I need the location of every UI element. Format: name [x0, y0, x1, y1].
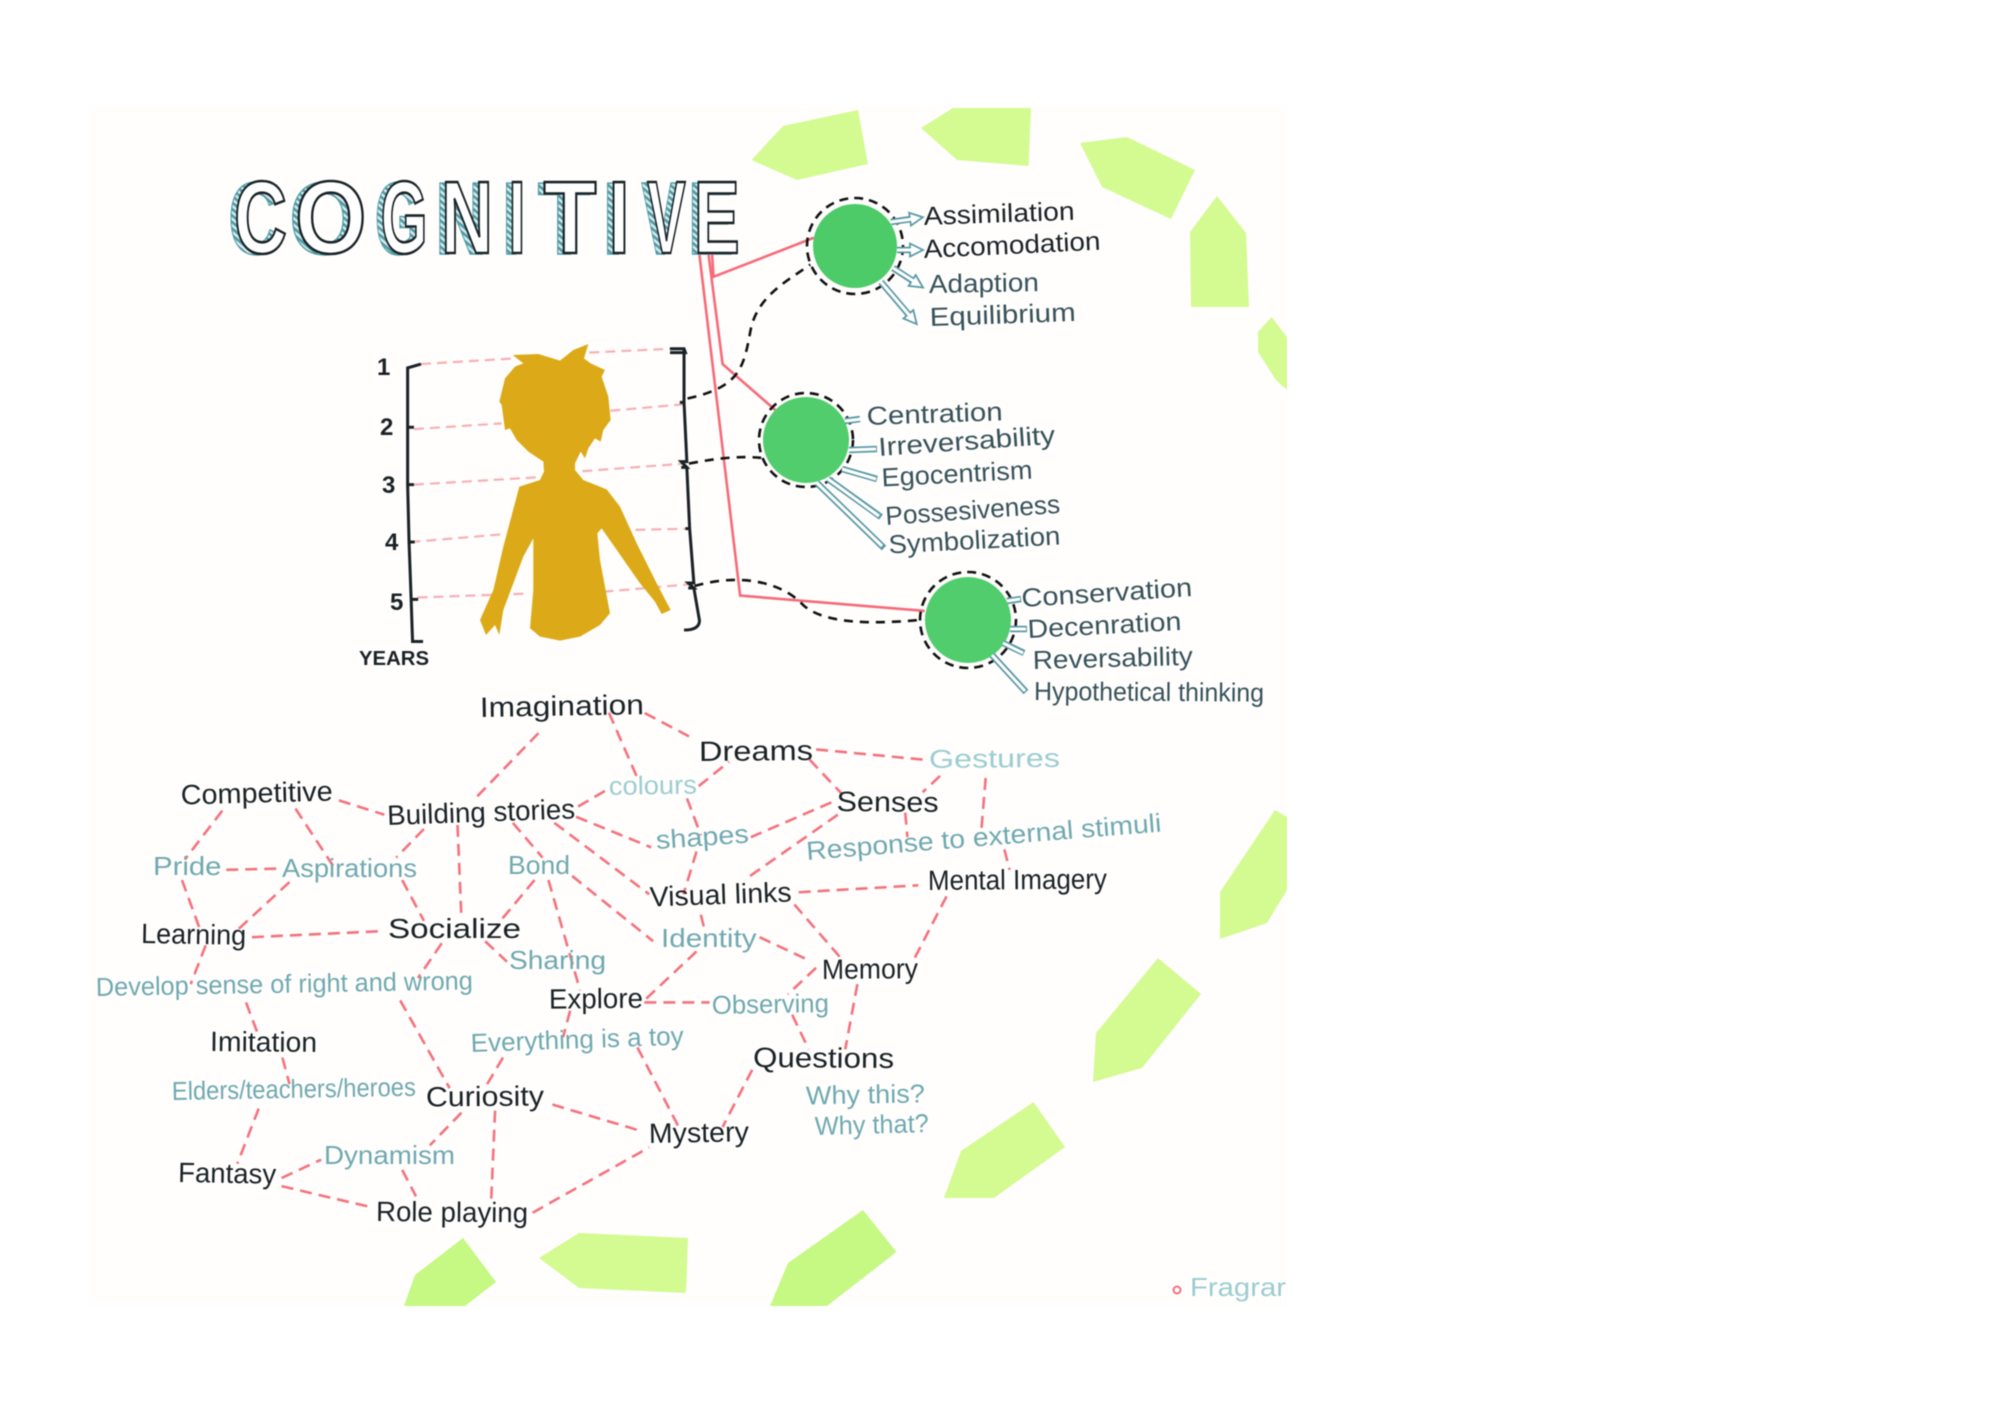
title: COGNITIVE: I: [608, 160, 630, 275]
network words: primary (dark): Visual links: [649, 877, 792, 912]
labels: circle 3: Decenration: [1027, 606, 1182, 644]
year numbers: [377, 354, 403, 616]
circle group 2: green node: [759, 393, 853, 487]
network words: primary (dark): Fantasy: [178, 1157, 276, 1190]
labels: circle 1: Accomodation: [923, 226, 1101, 264]
title: COGNITIVE: G: [375, 161, 422, 276]
title: COGNITIVE: T: [544, 160, 596, 275]
labels: circle 1: Adaption: [929, 267, 1039, 299]
labels: circle 2: Centration: [866, 396, 1003, 431]
network words: primary (dark): Dreams: [699, 735, 813, 767]
title: COGNITIVE: I: [502, 161, 520, 276]
network words: primary (dark): Questions: [753, 1042, 894, 1074]
year numbers: 2: [380, 414, 393, 441]
network words: secondary (teal): Response to external stimuli: [805, 808, 1162, 866]
background panel: [87, 105, 1287, 1306]
year numbers: 5: [390, 589, 403, 616]
icon: child silhouette: [480, 344, 671, 641]
title: COGNITIVE: C: [228, 161, 281, 276]
labels: circle 2: Irreversability: [877, 420, 1056, 462]
green pentagon border: [404, 108, 1287, 1306]
title: COGNITIVE: G: [381, 160, 428, 275]
network words: primary (dark): Explore: [549, 983, 643, 1015]
title: COGNITIVE: O: [289, 161, 360, 276]
red connector lines from title: [699, 238, 925, 611]
network words: secondary (teal): Identity: [661, 923, 756, 953]
network edges: left: [182, 713, 681, 1213]
network words: secondary (teal): Elders/teachers/heroes: [172, 1072, 416, 1106]
title: COGNITIVE: O: [295, 160, 366, 275]
network words: secondary (teal): Aspirations: [282, 853, 417, 883]
network words: primary (dark): [141, 689, 1107, 1228]
arrows from circles to labels: [817, 219, 1027, 692]
title: COGNITIVE: N: [441, 160, 493, 275]
network words: secondary (teal): colours: [609, 769, 697, 801]
network words: secondary (teal): shapes: [655, 819, 750, 855]
network words: secondary (teal): Why that?: [814, 1108, 929, 1141]
network words: primary (dark): Imitation: [210, 1026, 317, 1058]
right year bracket: [670, 349, 699, 630]
network words: secondary (teal): Sharing: [509, 945, 606, 975]
network words: secondary (teal): [96, 743, 1162, 1170]
labels: circle 3: Reversability: [1032, 641, 1193, 675]
title: COGNITIVE: V: [647, 160, 686, 275]
title: COGNITIVE: I: [602, 161, 624, 276]
labels: circle 2: [866, 396, 1061, 559]
network words: primary (dark): Imagination: [480, 689, 644, 723]
title: COGNITIVE: E: [694, 160, 740, 275]
network words: secondary (teal): Develop sense of right and wrong: [96, 965, 473, 1002]
labels: circle 2: Possesiveness: [884, 489, 1061, 531]
black dashed connectors from ages to circles: [688, 265, 923, 622]
title: COGNITIVE: V: [641, 161, 680, 276]
network words: secondary (teal): Gestures: [929, 743, 1060, 774]
labels: circle 2: Egocentrism: [881, 455, 1033, 492]
network words: secondary (teal): Observing: [712, 988, 829, 1020]
labels: circle 2: Symbolization: [888, 521, 1061, 559]
title: COGNITIVE: [228, 160, 740, 276]
network words: primary (dark): Senses: [836, 786, 939, 818]
network words: primary (dark): Role playing: [376, 1196, 528, 1228]
network words: secondary (teal): Why this?: [806, 1078, 925, 1110]
pink age guide lines: [410, 349, 691, 598]
title: COGNITIVE: C: [234, 160, 287, 275]
network words: secondary (teal): Pride: [153, 851, 222, 881]
title: COGNITIVE: N: [435, 161, 487, 276]
age ruler: [408, 349, 699, 642]
network words: primary (dark): Learning: [141, 918, 246, 951]
title: COGNITIVE: I: [508, 160, 526, 275]
labels: circle 1: Equilibrium: [929, 297, 1076, 332]
network words: primary (dark): Competitive: [180, 776, 333, 810]
network words: primary (dark): Memory: [822, 953, 918, 985]
network words: secondary (teal): Dynamism: [324, 1140, 455, 1170]
title: COGNITIVE: E: [688, 161, 734, 276]
year numbers: 1: [377, 354, 390, 381]
network edges: right: [644, 713, 1010, 1127]
year numbers: 3: [382, 472, 395, 499]
labels: circle 1: [923, 196, 1101, 332]
network words: secondary (teal): Bond: [508, 850, 570, 880]
labels: circle 1: Assimilation: [923, 196, 1075, 231]
title: COGNITIVE: T: [538, 161, 590, 276]
labels: circle 3: Conservation: [1020, 572, 1193, 613]
network words: primary (dark): Mystery: [649, 1116, 749, 1149]
circle group 3: green node: [920, 572, 1016, 668]
footer: fragment of clipped legend: Fragrar: [1190, 1272, 1286, 1302]
network words: primary (dark): Curiosity: [426, 1080, 544, 1112]
year numbers: 4: [385, 529, 399, 556]
labels: circle 3: Hypothetical thinking: [1034, 676, 1264, 708]
left year bracket: [408, 364, 423, 642]
labels: circle 3: [1020, 572, 1264, 708]
circle group 1: green node: [807, 198, 903, 294]
network words: secondary (teal): Everything is a toy: [470, 1021, 684, 1058]
label: YEARS: YEARS: [359, 648, 429, 670]
network words: primary (dark): Building stories: [387, 793, 576, 831]
network words: primary (dark): Mental Imagery: [928, 863, 1107, 896]
network words: primary (dark): Socialize: [388, 913, 521, 944]
